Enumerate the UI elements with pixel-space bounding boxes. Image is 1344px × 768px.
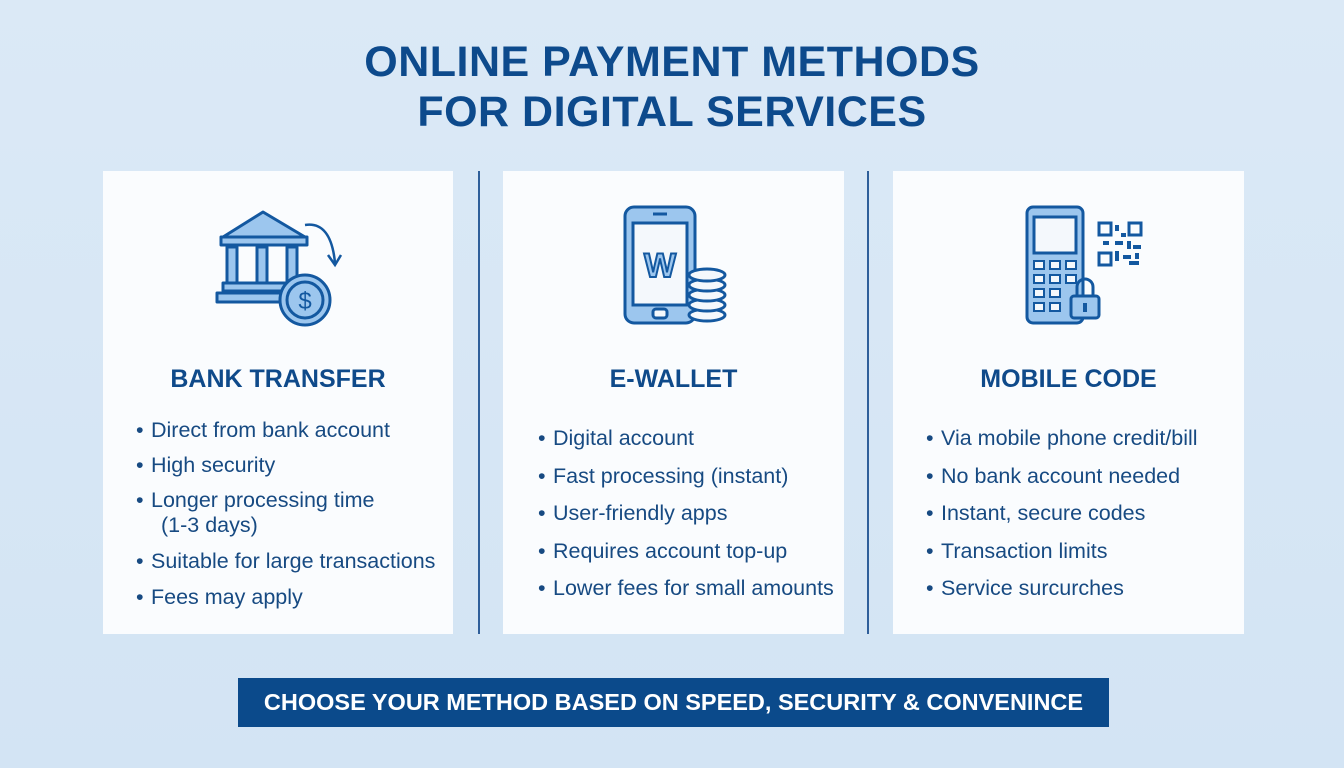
panel: mobile code (893, 171, 1244, 634)
panel: bank transfer: Longer processing time (151, 488, 374, 512)
panel: mobile code: Transaction limits (941, 539, 1107, 563)
title: FOR DIGITAL SERVICES (417, 88, 927, 136)
heading: MOBILE CODE (980, 365, 1157, 393)
banner: CHOOSE YOUR METHOD BASED ON SPEED, SECURITY & CONVENINCE (264, 689, 1083, 715)
panel: mobile code: Service surcurches (941, 576, 1124, 600)
panel: e-wallet: Requires account top-up (553, 539, 787, 563)
icon: bank with coin (216, 210, 342, 326)
panel: e-wallet: User-friendly apps (553, 501, 727, 525)
panel: e-wallet: Digital account (553, 426, 694, 450)
panel: e-wallet: Lower fees for small amounts (553, 576, 834, 600)
bullet list (926, 426, 1198, 600)
heading: E-WALLET (610, 365, 737, 393)
divider right (867, 171, 869, 634)
bullet list (136, 418, 435, 609)
title: ONLINE PAYMENT METHODS (364, 38, 980, 86)
panel: bank transfer: Fees may apply (151, 585, 303, 609)
panel: bank transfer: Suitable for large transactions (151, 549, 435, 573)
panel: mobile code: No bank account needed (941, 464, 1180, 488)
panel: bank transfer: High security (151, 453, 275, 477)
bullet list (538, 426, 834, 600)
divider left (478, 171, 480, 634)
panel: bank transfer: Direct from bank account (151, 418, 390, 442)
panel: e-wallet: Fast processing (instant) (553, 464, 788, 488)
banner (238, 678, 1109, 727)
panel: e-wallet (503, 171, 844, 634)
icon: mobile phone with QR and lock (1026, 206, 1142, 324)
icon: phone with coins: W (644, 247, 677, 285)
panel: mobile code: Via mobile phone credit/bill (941, 426, 1198, 450)
panel: bank transfer (103, 171, 453, 634)
heading: BANK TRANSFER (170, 365, 386, 393)
panel: bank transfer: (1-3 days) (161, 513, 258, 537)
title (364, 38, 980, 136)
panel: mobile code: Instant, secure codes (941, 501, 1145, 525)
icon: phone with coins (624, 206, 726, 324)
icon: bank with coin: $ (298, 288, 312, 315)
